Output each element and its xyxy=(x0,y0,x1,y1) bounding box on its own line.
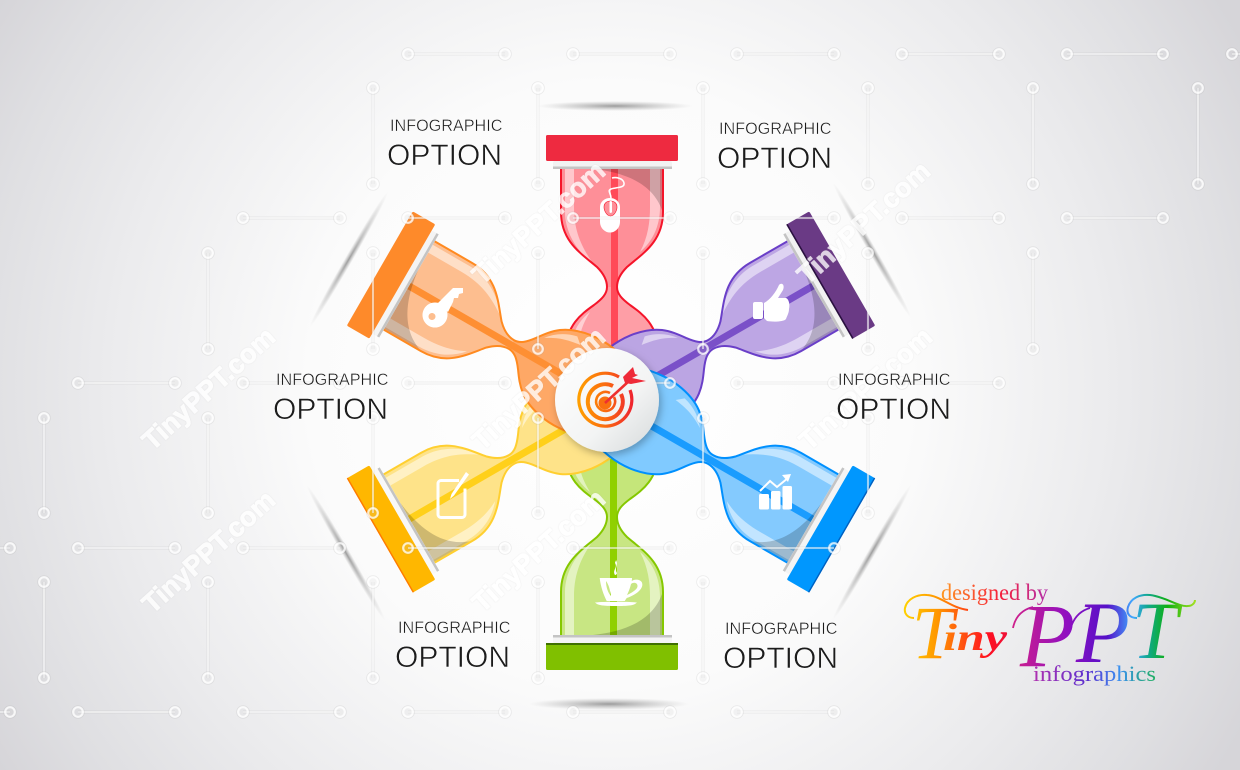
hourglass: green xyxy=(546,377,678,670)
option label: top right: OPTION xyxy=(717,142,832,175)
option label: middle right: INFOGRAPHIC xyxy=(838,371,951,389)
logo: designed by Tiny PPT infographics: iny xyxy=(943,617,1007,659)
option label: top right xyxy=(717,120,832,175)
hourglass ring xyxy=(347,135,875,670)
option label: middle left: OPTION xyxy=(273,393,388,426)
watermarks: TinyPPT.com xyxy=(793,322,938,456)
option label: top left: OPTION xyxy=(387,139,502,172)
option label: middle right: OPTION xyxy=(836,393,951,426)
option label: middle left xyxy=(273,371,389,426)
logo: designed by Tiny PPT infographics: infographics xyxy=(1033,661,1156,686)
icon: coffee cup xyxy=(595,560,642,606)
floor shadows around the hourglasses xyxy=(304,101,914,710)
logo: designed by Tiny PPT infographics: T xyxy=(1132,585,1183,676)
icon: thumbs up xyxy=(753,284,789,322)
option label: middle right xyxy=(836,371,951,426)
option label: bottom left: INFOGRAPHIC xyxy=(398,619,511,637)
watermarks: TinyPPT.com xyxy=(466,156,611,290)
watermarks: TinyPPT.com xyxy=(136,485,281,619)
watermarks: TinyPPT.com xyxy=(466,322,611,456)
hourglass: red xyxy=(546,135,678,427)
option label: bottom right xyxy=(723,620,838,675)
option label: bottom right: OPTION xyxy=(723,642,838,675)
logo: designed by Tiny PPT infographics: T xyxy=(912,592,959,675)
watermarks: TinyPPT.com xyxy=(466,484,611,618)
watermarks xyxy=(136,156,938,619)
hourglass: purple xyxy=(556,211,875,472)
icon: note with pen xyxy=(438,472,469,518)
hourglass: yellow xyxy=(347,332,666,593)
logo: designed by Tiny PPT infographics: P xyxy=(1019,587,1075,686)
icon: target with arrow xyxy=(579,367,646,426)
hourglass: orange xyxy=(347,211,666,472)
option label: middle left: INFOGRAPHIC xyxy=(276,371,389,389)
option label: top left xyxy=(387,117,503,172)
center disc with target icon xyxy=(555,348,659,452)
option label: top right: INFOGRAPHIC xyxy=(719,120,832,138)
icon: growth chart xyxy=(759,474,792,510)
option label: bottom left xyxy=(395,619,511,674)
watermarks: TinyPPT.com xyxy=(791,156,936,290)
watermarks: TinyPPT.com xyxy=(136,322,281,456)
hourglass: blue xyxy=(556,332,875,593)
option label: bottom right: INFOGRAPHIC xyxy=(725,620,838,638)
logo: designed by Tiny PPT infographics: designed by xyxy=(941,580,1048,605)
logo: designed by Tiny PPT infographics: P xyxy=(1075,585,1130,682)
option label: bottom left: OPTION xyxy=(395,641,510,674)
logo: designed by Tiny PPT infographics xyxy=(905,580,1195,686)
option label: top left: INFOGRAPHIC xyxy=(390,117,503,135)
icon: computer mouse xyxy=(600,178,624,232)
icon: key xyxy=(422,288,463,327)
